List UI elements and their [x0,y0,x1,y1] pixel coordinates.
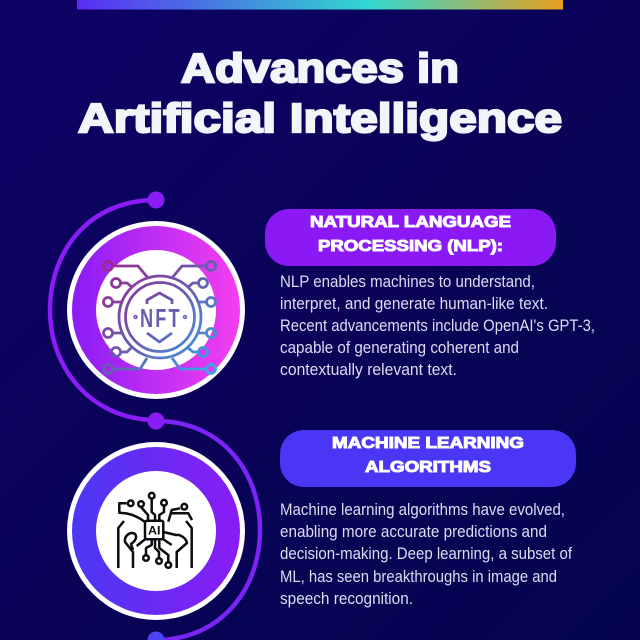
text block: machine learning description: speech recognition. [280,589,413,608]
panel: natural language processing [265,209,595,379]
text block: machine learning description: ML, has seen breakthroughs in image and [280,567,557,586]
text block: machine learning description [280,500,572,608]
heading pill: machine learning [280,430,576,487]
icon: AI chip with hands: AI [148,524,160,538]
AI badge [67,442,245,620]
icon: AI chip with hands [118,493,192,568]
NFT badge [67,221,245,399]
icon: NFT circuit [104,262,216,374]
panel: machine learning algorithms [280,430,576,608]
text block: NLP description: contextually relevant text. [280,360,457,379]
timeline dot 3 [148,632,164,640]
heading pill: machine learning: ALGORITHMS [365,459,491,476]
heading pill: NLP: PROCESSING (NLP): [318,238,503,255]
heading pill: machine learning: MACHINE LEARNING [332,435,524,452]
title: Artificial Intelligence [78,95,562,141]
text block: machine learning description: decision-making. Deep learning, a subset of [280,544,572,563]
timeline dot 1 [148,192,164,208]
top gradient bar [77,0,563,10]
text block: machine learning description: Machine learning algorithms have evolved, [280,500,565,519]
text block: NLP description: NLP enables machines to understand, [280,272,535,291]
text block: NLP description: capable of generating coherent and [280,338,519,357]
timeline dot 2 [148,412,164,430]
text block: NLP description [280,272,595,379]
icon: NFT circuit: NFT [140,304,182,333]
timeline connector [50,200,260,640]
heading pill: NLP: NATURAL LANGUAGE [310,214,511,231]
heading pill: NLP [265,209,556,266]
title [78,45,562,141]
title: Advances in [181,45,459,91]
text block: NLP description: interpret, and generate human-like text. [280,294,548,313]
text block: NLP description: Recent advancements include OpenAI's GPT-3, [280,316,595,335]
text block: machine learning description: enabling more accurate predictions and [280,522,547,541]
